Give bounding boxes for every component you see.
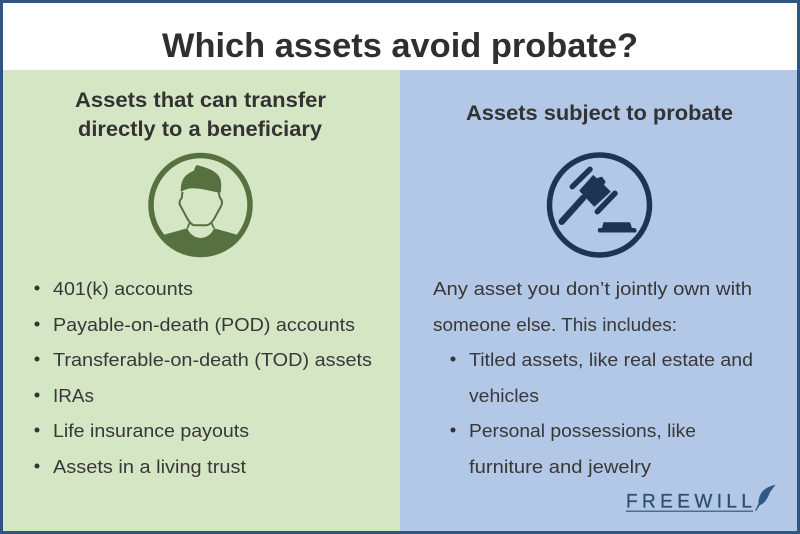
title: Which assets avoid probate?: [162, 27, 638, 65]
panel: assets subject to probate: [400, 70, 798, 532]
bullet: TOD assets: Transferable-on-death (TOD) assets: [53, 349, 372, 370]
list: assets that transfer: [34, 278, 372, 477]
heading: assets that can transfer: Assets that can transfer: [75, 89, 326, 112]
logo: FreeWill: [626, 485, 776, 512]
bullet: POD accounts: Payable-on-death (POD) accounts: [53, 314, 355, 335]
bullet: titled assets: Titled assets, like real estate and: [469, 349, 753, 370]
text: any asset intro: someone else. This includes:: [433, 314, 677, 335]
logo: FreeWill: FREEWILL: [626, 492, 752, 512]
heading: assets that can transfer: [75, 89, 326, 141]
bullet: IRAs: IRAs: [53, 385, 94, 406]
icon: person in circle: [151, 156, 250, 254]
bullet: titled assets: [450, 349, 753, 406]
bullet: personal possessions: [450, 420, 696, 477]
bullet: life insurance: Life insurance payouts: [53, 420, 249, 441]
bullet: IRAs: [34, 385, 94, 406]
heading: assets that can transfer: directly to a beneficiary: [78, 118, 322, 141]
text: any asset intro: [433, 278, 752, 335]
text: any asset intro: Any asset you don’t jointly own with: [433, 278, 752, 299]
heading: assets subject to probate: Assets subject to probate: [466, 102, 733, 125]
icon: gavel in circle: [550, 155, 650, 255]
panel: assets that transfer directly: [2, 70, 400, 532]
bullet: personal possessions: furniture and jewelry: [469, 456, 652, 477]
icon: quill feather: [755, 485, 776, 511]
bullet: 401(k) accounts: 401(k) accounts: [53, 278, 193, 299]
bullet: living trust: Assets in a living trust: [53, 456, 246, 477]
bullet: personal possessions: Personal possessions, like: [469, 420, 696, 441]
bullet: titled assets: vehicles: [469, 385, 539, 406]
